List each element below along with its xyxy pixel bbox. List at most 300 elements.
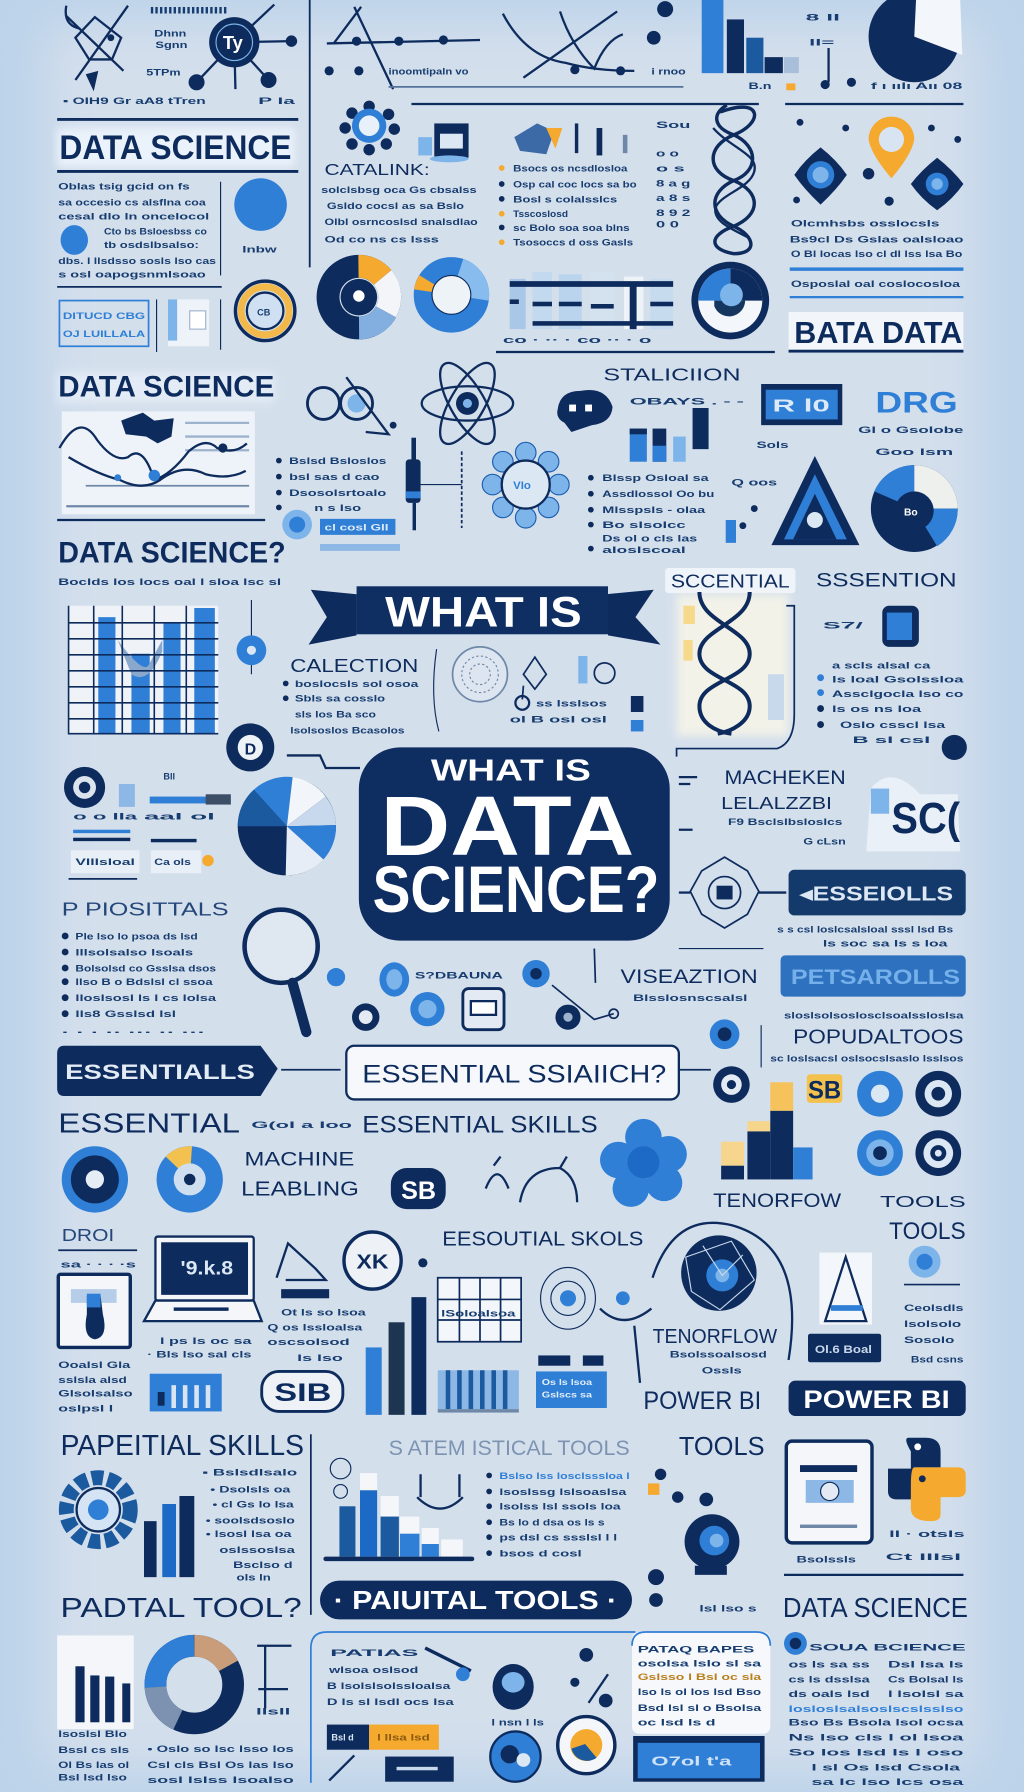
data box xyxy=(59,299,157,352)
navy and orange bar: Bsl d xyxy=(331,1733,354,1743)
bullet list: Mlsspsls - olaa xyxy=(602,505,707,515)
heading popular tools: POPUDALTOOS xyxy=(793,1025,963,1048)
icon: blue disc with text xyxy=(904,1246,963,1364)
text block left: s osl oapogsnmlsoao xyxy=(58,270,206,280)
icon: triangle xyxy=(771,456,859,545)
bullet list: aloslscoal xyxy=(602,545,686,555)
icon: sb ring: SIB xyxy=(274,1379,331,1407)
text lines: l ps ls oc sa xyxy=(160,1336,253,1346)
heading tensorflow small: TENORFOW xyxy=(713,1190,842,1212)
text block bottom right: l sl Os lsd Csola xyxy=(811,1762,962,1772)
heading tensorflow: TENORFLOW xyxy=(653,1325,778,1348)
heading calection: CALECTION xyxy=(290,655,418,676)
bullet list right: a scls alsal ca xyxy=(832,661,932,671)
dna panel centre right xyxy=(677,592,794,757)
rule under chart xyxy=(57,519,265,521)
icon: blue pin xyxy=(237,600,266,674)
donut chart 4: Bo xyxy=(904,507,918,518)
text lines: Ooalsl Gla xyxy=(58,1360,132,1370)
icon: rounded square xyxy=(823,606,919,647)
icon: sb navy: SB xyxy=(401,1177,436,1205)
text lines: Gl o Gsolobe xyxy=(858,425,963,435)
text lines: Glsolsalso xyxy=(58,1389,133,1399)
left cluster of icons: Ca ols xyxy=(154,857,191,867)
text lines xyxy=(679,925,953,949)
text lines: Q os lssloalsa xyxy=(267,1322,364,1332)
icon: blue flower xyxy=(482,442,569,528)
character column: o s xyxy=(656,163,685,173)
icon: tablet xyxy=(786,1441,872,1564)
heading machine learning: MACHEKEN xyxy=(725,767,846,789)
text lines under donut xyxy=(147,1744,295,1785)
white bar chart panel xyxy=(57,1635,134,1783)
icon: blue disc with text: Bsd csns xyxy=(911,1354,963,1364)
grid panel xyxy=(438,1278,521,1342)
bar chart top right: B.n xyxy=(749,81,772,91)
text block bottom right: Cs Bolsal ls xyxy=(888,1674,963,1684)
character column: 8 9 2 xyxy=(656,208,690,218)
icon: tensor globe xyxy=(681,1235,757,1311)
text lines: sslsla alsd xyxy=(58,1375,127,1385)
bullet list: Tsosoccs d oss Gasls xyxy=(513,238,633,248)
stacked bars xyxy=(721,1082,813,1179)
text block bottom middle: PATIAS xyxy=(330,1648,418,1658)
bullet list xyxy=(202,1467,298,1583)
icon: laptop xyxy=(144,1237,262,1321)
gear icon middle xyxy=(339,101,400,155)
small skill icons: S?DBAUNA xyxy=(415,970,504,980)
network diagram top left: Ty xyxy=(223,32,244,53)
label: scential: SCCENTIAL xyxy=(671,570,790,591)
text block bottom middle: wlsoa oslsod xyxy=(328,1665,418,1675)
rule under donuts xyxy=(496,351,775,353)
text block bottom right: os ls sa ss xyxy=(789,1659,870,1669)
left cluster of icons: Vlllsloal xyxy=(75,857,135,867)
framed figure: sa · · · ·s xyxy=(61,1259,136,1269)
character column: 8 a g xyxy=(656,178,690,188)
small marks beside pins xyxy=(793,119,961,206)
text block right xyxy=(790,218,964,298)
heading padtal tool: PADTAL TOOL? xyxy=(61,1592,302,1623)
heading droi: DROI xyxy=(62,1225,114,1245)
text line: sloslsolsoslosclsoalssloslsa xyxy=(784,1010,965,1020)
bullet list: Bslsd Bsloslos xyxy=(289,456,386,466)
donut chart 4 xyxy=(871,465,958,552)
text block bottom right: Bso Bs Bsola lsol ocsa xyxy=(789,1718,965,1728)
icon: wheel: CB xyxy=(257,307,271,317)
icon: fingerprint: ss lsslsos xyxy=(536,698,607,708)
blue box xyxy=(633,1736,765,1782)
bullet list: Ds ol o cls las xyxy=(602,534,697,544)
icon: ring with yellow xyxy=(558,1717,615,1774)
icon: atom xyxy=(422,355,513,452)
heading visualization xyxy=(621,966,758,1003)
blue badge xyxy=(282,510,400,551)
heading: ssection: SSSENTION xyxy=(816,569,957,591)
text block bottom middle xyxy=(327,1648,455,1707)
bullet list: n s lso xyxy=(314,503,362,513)
button: power bi xyxy=(789,1381,966,1416)
heading tensorflow xyxy=(653,1325,778,1376)
button: blue popular xyxy=(781,955,966,997)
line graph top middle: i rnoo xyxy=(651,66,686,76)
text block xyxy=(321,185,478,244)
donut chart 1 xyxy=(328,266,390,328)
white text panel: osolsa lslo sl sa xyxy=(638,1658,763,1668)
icon: blue disc with text: lsolsolo xyxy=(904,1319,962,1329)
navy pill: essentials xyxy=(57,1046,278,1096)
navy and orange bar: l llsa lsd xyxy=(377,1733,430,1743)
panel: sc: SC( xyxy=(891,795,960,843)
line graph top middle: inoomtipaln vo xyxy=(389,66,469,76)
text lines: · Bls lso sal cls xyxy=(147,1350,251,1360)
bullets left: lloslsosl ls l cs lolsa xyxy=(75,993,217,1003)
text lines under donut: • Oslo so lsc lsso los xyxy=(147,1744,294,1754)
icon: sb navy xyxy=(391,1168,446,1209)
bullet list xyxy=(588,473,714,555)
text block left: Oblas tsig gcid on fs xyxy=(58,182,190,192)
pie chart top right xyxy=(869,0,962,91)
icon: navy dot xyxy=(942,735,967,760)
icon: blue yellow ring xyxy=(157,1146,223,1213)
text block: Gsldo cocsl as sa Bslo xyxy=(327,201,465,211)
text lines under donut: Csl cls Bsl Os las lso xyxy=(147,1760,294,1770)
heading machine: LEABLING xyxy=(241,1177,359,1200)
rule xyxy=(58,1249,137,1251)
pie chart centre left xyxy=(238,777,336,875)
small text near heading: lsl lso s xyxy=(699,1603,757,1613)
text lines: s s csl loslcsalsloal sssl lsd Bs xyxy=(777,925,953,935)
white text panel: oc lsd ls d xyxy=(638,1718,715,1728)
blue stripes chart xyxy=(438,1370,519,1413)
button: essentials tools: ◂ESSEIOLLS xyxy=(799,883,953,906)
framed figure xyxy=(58,1259,136,1347)
character column: Sou xyxy=(656,120,690,130)
bullet list middle: lsoslssg lslsoaslsa xyxy=(499,1487,628,1497)
bullets left: llso B o Bdslsl cl ssoa xyxy=(75,977,214,987)
icon: blue blob xyxy=(234,178,287,231)
text block: Od co ns cs lsss xyxy=(325,234,439,244)
text block left: sa occesio cs alsflna coa xyxy=(58,198,207,208)
main title: what is: WHAT IS xyxy=(431,753,591,788)
icon: arm: XK xyxy=(357,1251,389,1274)
icon cluster xyxy=(514,123,627,155)
bullet list right xyxy=(817,661,965,745)
bar chart left xyxy=(69,606,218,734)
bullets left: Bolsolsd co Gsslsa dsos xyxy=(75,963,216,973)
network diagram top left: Dhnn xyxy=(154,29,187,39)
left cluster of icons: Bll xyxy=(163,771,175,781)
text block bottom middle: D ls sl lsdl ocs lsa xyxy=(327,1697,455,1707)
small bars xyxy=(630,408,789,462)
character column xyxy=(656,120,690,229)
triangle panel: Ol.6 Boal xyxy=(815,1344,872,1356)
text lines: oscsolsod xyxy=(267,1337,350,1347)
grid panel: lSoloalsoa xyxy=(441,1309,517,1319)
character column: 0 0 xyxy=(656,219,679,229)
blue box: O7ol t'a xyxy=(651,1755,733,1769)
icon: navy diamond right xyxy=(911,158,963,210)
icon: blue flower: VIo xyxy=(513,480,531,492)
bullet list: • Dsolsls oa xyxy=(210,1485,292,1495)
bullet list: oslssoslsa xyxy=(219,1545,296,1555)
icon: sb ring xyxy=(262,1371,343,1411)
line graph top middle xyxy=(325,1,686,89)
white text panel xyxy=(632,1632,770,1734)
text block bottom right: So los lsd ls l oso xyxy=(789,1747,964,1757)
icon: test tube xyxy=(406,438,462,530)
icon: python logo xyxy=(888,1438,966,1521)
text block right: Osposlal oal coslocosloa xyxy=(791,279,961,289)
bullet list: Bo slsolcc xyxy=(602,520,686,530)
bullet list: ols ln xyxy=(237,1573,271,1583)
navy bar xyxy=(329,1755,454,1782)
pie chart top right: f ı ıılı Aıı 08 xyxy=(871,81,962,91)
icon: blue eye xyxy=(62,1146,128,1213)
subheading: OBAYS . - - xyxy=(630,397,744,407)
bullet list: • lsosl lsa oa xyxy=(206,1529,293,1539)
text block right: O Bl locas lso cl dl lss lsa Bo xyxy=(791,249,963,259)
white bar chart panel: Bssl cs sls xyxy=(58,1745,129,1755)
monitor icon: R l0 xyxy=(773,395,830,415)
donut chart 2 xyxy=(415,258,488,331)
icon: blue flower xyxy=(600,1119,687,1207)
stepped bar chart xyxy=(323,1473,474,1561)
heading stalicion: STALICIION xyxy=(603,365,741,385)
bullets: boslocsls sol osoa xyxy=(295,679,420,689)
bullet list middle: Bs lo d dsa os ls s xyxy=(499,1518,605,1528)
blue text block: Os ls lsoa xyxy=(542,1378,593,1387)
panel outline bottom xyxy=(311,1632,635,1783)
icon: flower outline xyxy=(679,857,786,928)
white bar chart panel: lsoslsl Blo xyxy=(58,1729,127,1739)
heading tools: TOOLS xyxy=(889,1218,966,1245)
bullet list right: Oslo csscl lsa xyxy=(840,720,947,730)
heading pale statistical tools: S ATEM ISTICAL TOOLS xyxy=(389,1435,630,1460)
main title panel xyxy=(359,747,670,941)
bullets xyxy=(283,679,420,736)
text block: solclsbsg oca Gs cbsalss xyxy=(321,185,477,195)
icon: fingerprint: ol B osl osl xyxy=(510,714,607,724)
box: essential xyxy=(346,1046,679,1099)
heading machine xyxy=(241,1149,359,1200)
heading power bi: POWER BI xyxy=(643,1387,761,1415)
bullet list: Dsosolsrtoalo xyxy=(289,488,387,498)
bullet list: Blssp Osloal sa xyxy=(602,473,710,483)
label: scential xyxy=(665,568,795,593)
divider line left column xyxy=(309,0,311,267)
network diagram top left xyxy=(63,5,297,106)
icon: navy ring xyxy=(226,723,360,771)
button: essentials tools xyxy=(789,870,966,915)
text lines xyxy=(147,1336,253,1360)
icon: blue disc with text: Ceolsdls xyxy=(904,1303,963,1313)
heading tensorflow: Bsolssoalsosd xyxy=(670,1350,767,1360)
icon: blue shield xyxy=(710,1019,761,1067)
icon: wheel xyxy=(235,281,295,341)
icon: tablet: Bsolssls xyxy=(797,1554,856,1564)
text lines: ls lso xyxy=(297,1353,344,1363)
text block bottom right xyxy=(784,1632,966,1787)
rule above title xyxy=(57,118,298,121)
icon: robot xyxy=(648,1514,739,1607)
left cluster of icons xyxy=(64,767,231,879)
icon: tool circles xyxy=(857,1071,961,1176)
bullet list xyxy=(276,456,387,513)
bar chart xyxy=(144,1496,194,1577)
text line: Boclds los locs oal l sloa lsc sl xyxy=(58,577,281,587)
divider xyxy=(57,286,222,288)
white text panel: Gslsso l Bsl oc sla xyxy=(638,1672,763,1682)
rule xyxy=(411,103,759,105)
line chart panel xyxy=(59,411,255,514)
white bar chart panel: Ol Bs las ol xyxy=(58,1760,129,1770)
dna helix top xyxy=(713,105,755,254)
icons bottom middle xyxy=(425,1648,613,1728)
triangle panel xyxy=(808,1253,881,1362)
bullet list right: ls os ns loa xyxy=(832,704,923,714)
small bars: Sols xyxy=(757,440,789,450)
character column: a 8 s xyxy=(656,193,690,203)
text block left: tb osdslbsalso: xyxy=(104,240,199,250)
bullet list: Tsscoslosd xyxy=(513,209,568,219)
network diagram top left: P la xyxy=(258,96,297,106)
small label: Inbw xyxy=(242,245,278,255)
navy pill: essentials: ESSENTIALLS xyxy=(65,1059,255,1084)
white text panel: PATAQ BAPES xyxy=(638,1645,754,1655)
network diagram top left: IIIIIIIIIIIIIIIII xyxy=(150,6,227,16)
panel: sc xyxy=(866,777,960,851)
pill: paiuital tools xyxy=(320,1581,632,1619)
text lines: ls soc sa ls s loa xyxy=(823,938,949,948)
icon: blue circle xyxy=(490,1731,541,1782)
bullet list right: B sl csl xyxy=(853,735,930,745)
heading essential skols: EESOUTIAL SKOLS xyxy=(442,1228,643,1251)
bullets: lsolsoslos Bcasolos xyxy=(290,726,405,736)
server columns xyxy=(503,272,673,345)
bullet list xyxy=(499,163,637,248)
bullet list: Bosl s colalsslcs xyxy=(513,194,617,204)
heading catalink: CATALINK: xyxy=(325,162,430,179)
text block left: dbs. l llsdsso sosls lso cas xyxy=(58,256,216,266)
icon: arm xyxy=(277,1232,427,1298)
small marks near triangle: Q oos xyxy=(731,478,777,488)
blue block xyxy=(150,1374,222,1411)
small icons by chart xyxy=(330,1458,713,1509)
bullet list: ▪ Bslsdlsalo xyxy=(202,1467,298,1477)
text block right: Olcmhsbs osslocsls xyxy=(791,218,939,228)
bullet list: Bsclso d xyxy=(233,1560,293,1570)
bullet list middle xyxy=(486,1471,630,1559)
icon: sb badge: SB xyxy=(808,1076,841,1104)
icon: speech blob xyxy=(557,390,613,432)
bullets: Sbls sa cosslo xyxy=(295,694,386,704)
heading machine learning xyxy=(679,767,846,847)
text block right: Bs9cl Ds Gslas oalsloao xyxy=(790,234,964,244)
bullets left: lls8 Gsslsd lsl xyxy=(75,1009,176,1019)
small labels near python xyxy=(784,1529,965,1575)
text block left xyxy=(58,182,221,280)
small skill icons xyxy=(327,949,618,1031)
icon: ring xyxy=(679,1066,750,1103)
icon: navy diamond left xyxy=(794,147,847,205)
text block bottom right: Ns lso cls l ol lsoa xyxy=(789,1733,965,1743)
text block left: cesal dlo ln oncelocol xyxy=(58,211,209,221)
small labels near python: Ct lllsl xyxy=(886,1552,961,1562)
heading: data science question: DATA SCIENCE? xyxy=(58,536,286,569)
text block bottom right: cs ls dsslsa xyxy=(789,1674,871,1684)
heading visualization: Blsslosnscsalsl xyxy=(633,993,747,1003)
icon: eye swirl xyxy=(541,1267,651,1383)
white text panel: lso ls ol los lsd Bso xyxy=(638,1687,762,1697)
text block bottom right: sa lc lso lcs osa xyxy=(811,1777,965,1787)
text lines xyxy=(858,425,963,457)
icon: magnifying glass xyxy=(245,910,318,1032)
monitor icon xyxy=(761,384,842,425)
bullet list: sc Bolo soa soa blns xyxy=(513,223,630,233)
text lines: oslpsl l xyxy=(58,1403,113,1413)
arc around globe xyxy=(653,1223,792,1360)
heading: data science 2: DATA SCIENCE xyxy=(58,371,274,404)
icon: molecule circles xyxy=(307,377,397,434)
navy and orange bar xyxy=(327,1725,439,1750)
heading machine learning: LELALZZBI xyxy=(721,793,832,813)
data box: DITUCD CBG xyxy=(63,311,145,321)
box: essential: ESSENTIAL SSIAIICH? xyxy=(362,1060,666,1088)
small marks near triangle xyxy=(726,478,777,543)
small icons beside pie: ll= xyxy=(809,38,834,48)
text block bottom right: SOUA BCIENCE xyxy=(809,1642,966,1652)
heading tools: TOOLS xyxy=(679,1431,765,1461)
text lines xyxy=(267,1307,367,1363)
mini panel xyxy=(168,299,221,350)
donut chart bottom xyxy=(143,1633,246,1736)
icon cylinder xyxy=(418,123,469,162)
bullets: sls los Ba sco xyxy=(295,710,377,720)
pill: paiuital tools: · PAIUITAL TOOLS · xyxy=(334,1585,617,1615)
text lines: Goo lsm xyxy=(875,447,953,457)
bar chart top right xyxy=(702,0,799,91)
white bar chart panel: Bsl lsd lso xyxy=(58,1773,127,1783)
left cluster of icons: aal ol xyxy=(144,811,215,821)
bullet list middle: ps dsl cs ssslsl l l xyxy=(499,1533,617,1543)
text lines: Ot ls so lsoa xyxy=(281,1307,367,1317)
server columns: co · ·· · co ·· · o xyxy=(503,335,652,345)
right rule xyxy=(785,103,963,105)
text block bottom right: losloslsalsoslscslsslso xyxy=(789,1704,964,1714)
heading essential: ESSENTIAL xyxy=(58,1108,240,1139)
bullets left: lllsolsalso lsoals xyxy=(75,947,193,957)
icon: rounded square: S7/ xyxy=(823,621,864,631)
blue text block: Gslscs sa xyxy=(542,1391,593,1400)
scribble text: G(ol a loo xyxy=(251,1120,353,1130)
button: blue popular: PETSAROLLS xyxy=(791,964,960,989)
bullet list: Bsocs os ncsdlosloa xyxy=(513,163,629,173)
bullet list: Osp cal coc locs sa bo xyxy=(513,179,637,189)
character column: o o xyxy=(656,149,680,159)
blue text block xyxy=(536,1355,607,1408)
callout: bata data: BATA DATA xyxy=(794,315,962,350)
heading blue: DRG xyxy=(875,387,958,420)
bullets left: Ple lso lo psoa ds lsd xyxy=(75,931,198,941)
network diagram top left: ▪ OIH9 Gr aA8 tTren xyxy=(63,96,206,106)
heading persistals: P PIOSITTALS xyxy=(62,898,229,919)
text block left: Cto bs Bsloesbss co xyxy=(104,226,207,236)
heading machine learning: G cLsn xyxy=(803,837,846,847)
icons bottom middle: l nsn l ls xyxy=(491,1718,544,1728)
heading: data science 1: DATA SCIENCE xyxy=(59,129,291,167)
bullet list: • soolsdsoslo xyxy=(206,1515,295,1525)
